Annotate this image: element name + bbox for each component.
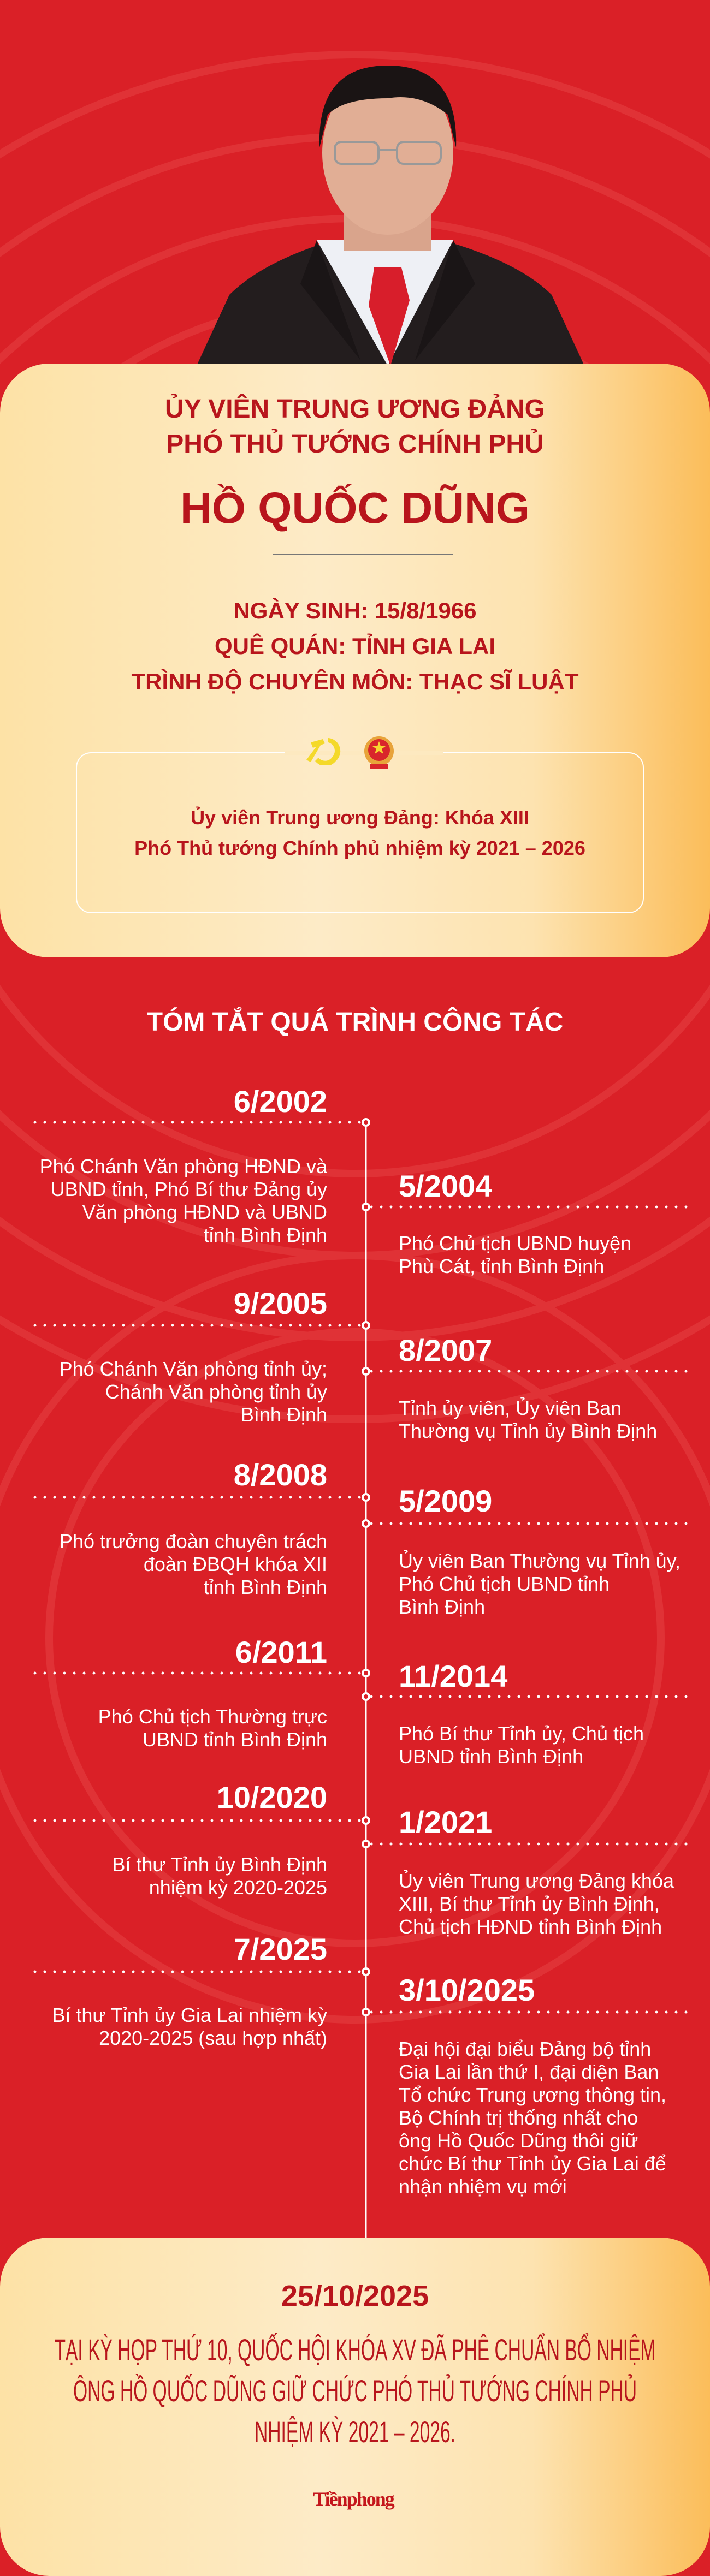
- timeline entries: Phó Chánh Văn phòng HĐND và: [40, 1155, 327, 1177]
- final statement: TẠI KỲ HỌP THỨ 10, QUỐC HỘI KHÓA XV ĐÃ PHÊ CHUẨN BỔ NHIỆM: [54, 2333, 656, 2367]
- timeline entries: Ủy viên Ban Thường vụ Tỉnh ủy,: [399, 1550, 681, 1572]
- title positions: PHÓ THỦ TƯỚNG CHÍNH PHỦ: [166, 430, 544, 459]
- timeline entries: Bí thư Tỉnh ủy Gia Lai nhiệm kỳ: [52, 2004, 327, 2026]
- timeline entries: 1/2021: [399, 1805, 492, 1839]
- timeline entries: chức Bí thư Tỉnh ủy Gia Lai để: [399, 2152, 666, 2175]
- timeline entries: UBND tỉnh Bình Định: [399, 1745, 583, 1768]
- timeline entries: 9/2005: [234, 1286, 327, 1320]
- timeline entries: 8/2007: [399, 1333, 492, 1367]
- 6/2011: [98, 1635, 327, 1751]
- 7/2025: [52, 1932, 327, 2049]
- timeline entries: tỉnh Bình Định: [204, 1224, 327, 1246]
- 10/2020: [112, 1780, 327, 1899]
- timeline entries: Chánh Văn phòng tỉnh ủy: [105, 1381, 327, 1403]
- timeline entries: nhiệm kỳ 2020-2025: [149, 1876, 327, 1899]
- timeline entries: 8/2008: [234, 1457, 327, 1492]
- timeline entries: tỉnh Bình Định: [204, 1576, 327, 1598]
- 6/2002: [40, 1084, 328, 1246]
- timeline entries: Bí thư Tỉnh ủy Bình Định: [112, 1853, 327, 1876]
- name: HỒ QUỐC DŨNG: [180, 484, 530, 532]
- timeline entries: 7/2025: [234, 1932, 327, 1966]
- timeline entries: 6/2011: [235, 1635, 327, 1669]
- 11/2014: [399, 1659, 644, 1768]
- timeline entries: Đại hội đại biểu Đảng bộ tỉnh: [399, 2038, 651, 2060]
- personal info: QUÊ QUÁN: TỈNH GIA LAI: [215, 633, 495, 659]
- 1/2021: [399, 1805, 674, 1938]
- timeline entries: Bộ Chính trị thống nhất cho: [399, 2107, 638, 2129]
- timeline entries: 10/2020: [217, 1780, 327, 1814]
- logo: Tiền Phong: Tiềnphong: [313, 2488, 394, 2510]
- timeline entries: Chủ tịch HĐND tỉnh Bình Định: [399, 1915, 662, 1938]
- timeline entries: XIII, Bí thư Tỉnh ủy Bình Định,: [399, 1893, 660, 1915]
- timeline entries: 3/10/2025: [399, 1973, 535, 2007]
- timeline entries: UBND tỉnh, Phó Bí thư Đảng ủy: [51, 1178, 327, 1200]
- icon: hammer and sickle: [306, 738, 341, 765]
- personal info: TRÌNH ĐỘ CHUYÊN MÔN: THẠC SĨ LUẬT: [132, 669, 578, 694]
- final statement: NHIỆM KỲ 2021 – 2026.: [255, 2414, 455, 2449]
- positions text: Ủy viên Trung ương Đảng: Khóa XIII: [191, 806, 529, 829]
- timeline entries: 11/2014: [399, 1659, 507, 1693]
- timeline entries: đoàn ĐBQH khóa XII: [144, 1553, 327, 1575]
- final date: 25/10/2025: [281, 2280, 429, 2312]
- timeline entries: 2020-2025 (sau hợp nhất): [99, 2027, 327, 2049]
- 5/2009: [399, 1484, 681, 1618]
- timeline entries: Phó Chánh Văn phòng tỉnh ủy;: [60, 1358, 327, 1380]
- title positions: [165, 394, 545, 459]
- icon: national emblem: [364, 736, 394, 769]
- timeline entries: Tỉnh ủy viên, Ủy viên Ban: [399, 1397, 622, 1419]
- timeline entries: Bình Định: [241, 1403, 327, 1426]
- bottom card: [0, 2238, 710, 2576]
- timeline entries: Thường vụ Tỉnh ủy Bình Định: [399, 1420, 657, 1442]
- inner box: [76, 752, 644, 913]
- timeline entries: 5/2009: [399, 1484, 492, 1518]
- timeline entries: Văn phòng HĐND và UBND: [82, 1201, 327, 1223]
- 3/10/2025: [399, 1973, 666, 2198]
- title positions: ỦY VIÊN TRUNG ƯƠNG ĐẢNG: [165, 395, 545, 424]
- timeline entries: 6/2002: [234, 1084, 327, 1119]
- personal info: NGÀY SINH: 15/8/1966: [233, 598, 477, 623]
- positions text: [134, 806, 585, 859]
- timeline entries: ông Hồ Quốc Dũng thôi giữ: [399, 2129, 638, 2152]
- timeline entries: UBND tỉnh Bình Định: [143, 1728, 327, 1751]
- 8/2007: [399, 1333, 657, 1442]
- timeline entries: Ủy viên Trung ương Đảng khóa: [399, 1870, 674, 1892]
- timeline entries: nhận nhiệm vụ mới: [399, 2175, 567, 2198]
- timeline entries: Phó trưởng đoàn chuyên trách: [60, 1530, 327, 1552]
- timeline entries: Phù Cát, tỉnh Bình Định: [399, 1255, 604, 1277]
- final statement: [54, 2333, 656, 2449]
- timeline entries: Bình Định: [399, 1596, 485, 1618]
- timeline entries: Phó Chủ tịch UBND huyện: [399, 1232, 631, 1254]
- 8/2008: [60, 1457, 327, 1598]
- final statement: ÔNG HỒ QUỐC DŨNG GIỮ CHỨC PHÓ THỦ TƯỚNG CHÍNH PHỦ: [73, 2373, 637, 2408]
- 5/2004: [399, 1169, 631, 1277]
- timeline entries: Phó Bí thư Tỉnh ủy, Chủ tịch: [399, 1722, 644, 1745]
- profile card: [0, 364, 710, 957]
- positions text: Phó Thủ tướng Chính phủ nhiệm kỳ 2021 – 2026: [134, 837, 585, 859]
- 9/2005: [60, 1286, 327, 1426]
- timeline entries: Phó Chủ tịch UBND tỉnh: [399, 1573, 610, 1595]
- timeline entries: 5/2004: [399, 1169, 492, 1203]
- portrait photo: [198, 66, 583, 364]
- timeline entries: Phó Chủ tịch Thường trực: [98, 1705, 327, 1728]
- timeline entries: Gia Lai lần thứ I, đại diện Ban: [399, 2061, 659, 2083]
- timeline entries: Tổ chức Trung ương thông tin,: [399, 2084, 666, 2106]
- personal info: [131, 598, 579, 694]
- divider: [273, 554, 453, 555]
- section heading: TÓM TẮT QUÁ TRÌNH CÔNG TÁC: [147, 1008, 563, 1037]
